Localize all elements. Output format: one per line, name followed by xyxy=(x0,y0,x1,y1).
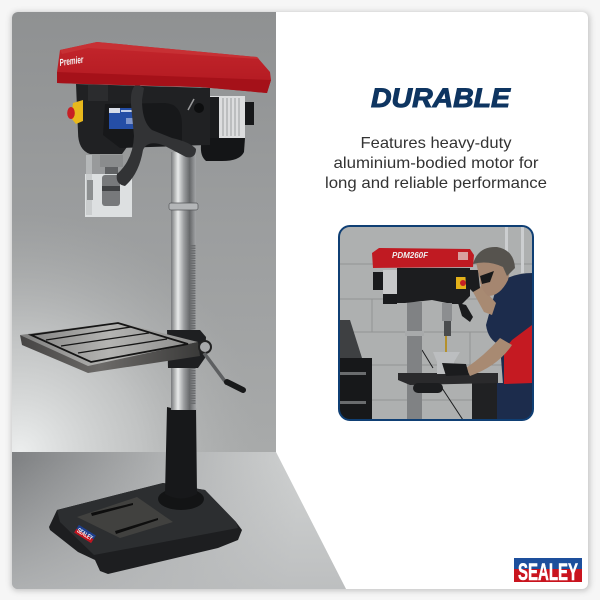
column clamp ring xyxy=(169,203,198,210)
shirt red panel xyxy=(504,325,533,384)
table crank handle xyxy=(199,341,243,390)
mechanic xyxy=(442,247,533,420)
table bracket xyxy=(167,330,206,368)
red head: PDM260F xyxy=(392,251,429,260)
tyres xyxy=(472,383,497,419)
column rack xyxy=(190,245,196,405)
work table xyxy=(20,322,200,373)
chuck guard xyxy=(85,155,132,217)
drill feed handle xyxy=(458,303,473,322)
description text xyxy=(325,135,547,192)
drilling swarf xyxy=(445,336,447,352)
red head xyxy=(372,248,474,268)
logo on base xyxy=(74,525,96,543)
description text: long and reliable performance xyxy=(325,175,547,192)
drill motor xyxy=(373,270,397,304)
photo: mechanic using drill xyxy=(339,226,533,420)
hair xyxy=(473,247,515,276)
shirt xyxy=(486,273,533,384)
head recess panel xyxy=(103,103,182,148)
head top vent xyxy=(88,85,108,101)
drill head body xyxy=(76,84,210,154)
product: pillar drill xyxy=(20,42,271,574)
drill body xyxy=(397,268,470,304)
speed selector knob xyxy=(188,99,204,113)
heading: DURABLE xyxy=(371,83,511,113)
emergency stop switch xyxy=(67,100,83,124)
workshop wall xyxy=(339,226,533,420)
jack stand xyxy=(340,320,362,358)
red head cover xyxy=(57,42,271,93)
brand text: Premier xyxy=(59,55,85,69)
studio backdrop wall xyxy=(12,12,276,452)
motor xyxy=(201,96,254,161)
trousers xyxy=(497,383,533,420)
table xyxy=(398,373,498,393)
glasses xyxy=(480,271,494,284)
spindle housing xyxy=(100,155,123,175)
lower column sleeve xyxy=(165,407,197,498)
lower glove xyxy=(442,363,469,376)
lower arm xyxy=(466,338,512,376)
description text: aluminium-bodied motor for xyxy=(334,155,539,172)
studio floor xyxy=(12,452,346,589)
face xyxy=(476,262,512,296)
tool chest xyxy=(339,358,372,420)
raised glove xyxy=(465,270,480,292)
info label xyxy=(109,108,141,129)
raised arm xyxy=(473,286,496,315)
photo border xyxy=(339,226,533,420)
feed handle xyxy=(117,84,196,186)
drill column xyxy=(407,302,422,420)
steel column xyxy=(171,152,196,410)
description text: Features heavy-duty xyxy=(360,135,512,152)
workpiece xyxy=(433,352,460,374)
power cable xyxy=(422,350,463,420)
yellow switch xyxy=(456,277,466,289)
logo on base: SEALEY xyxy=(75,527,94,542)
chuck xyxy=(442,303,452,336)
lower column collar xyxy=(158,488,204,510)
drill base xyxy=(49,483,242,574)
